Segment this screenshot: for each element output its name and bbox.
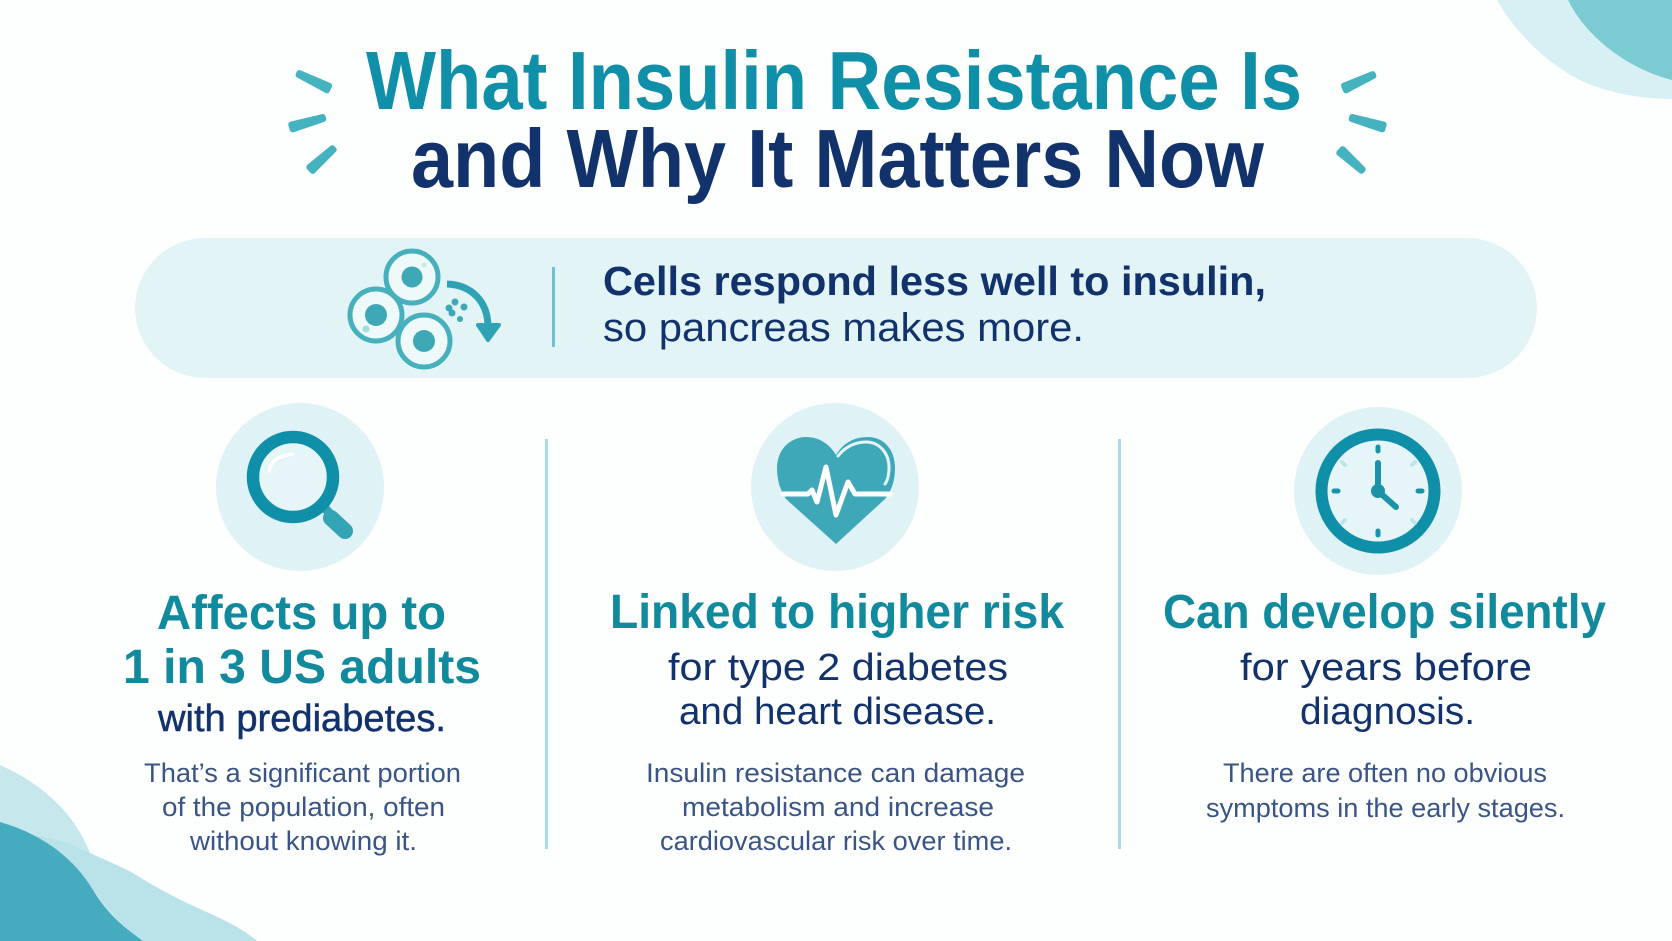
icon: magnifying glass: [216, 403, 384, 571]
column divider 1: [545, 439, 548, 849]
icon: cells with arrow: [350, 251, 499, 367]
subheading: and heart disease.: [679, 691, 996, 733]
column divider 2: [1118, 439, 1121, 849]
heading: Affects up to: [157, 587, 446, 640]
subheading: diagnosis.: [1300, 691, 1475, 733]
body text: symptoms in the early stages.: [1206, 793, 1565, 823]
banner divider: [552, 267, 555, 347]
body text: without knowing it.: [189, 826, 417, 856]
body text: [144, 758, 461, 856]
body text: [1206, 758, 1565, 823]
body text: [646, 758, 1025, 856]
panel: affects adults: [123, 403, 481, 856]
body text: of the population, often: [162, 792, 445, 822]
title accent sparks left: [291, 73, 334, 171]
subheading: for type 2 diabetes: [668, 647, 1008, 689]
body text: There are often no obvious: [1223, 758, 1547, 788]
banner text: [603, 258, 1266, 350]
body text: Insulin resistance can damage: [646, 758, 1025, 788]
heading: Can develop silently: [1163, 586, 1606, 639]
banner text: so pancreas makes more.: [603, 306, 1084, 350]
body text: metabolism and increase: [682, 792, 994, 822]
heading: [123, 587, 481, 694]
body text: That’s a significant portion: [144, 758, 461, 788]
title line 1: What Insulin Resistance Is: [366, 34, 1302, 127]
title: [366, 34, 1302, 205]
title line 2: and Why It Matters Now: [411, 112, 1264, 205]
panel: linked to risk: [610, 403, 1064, 856]
panel: develops silently: [1163, 407, 1606, 823]
icon: heart with pulse: [751, 403, 919, 571]
banner text: Cells respond less well to insulin,: [603, 258, 1266, 304]
subheading: with prediabetes.: [157, 698, 446, 740]
body text: cardiovascular risk over time.: [660, 826, 1012, 856]
subheading: [1240, 647, 1532, 733]
title accent sparks right: [1339, 74, 1384, 171]
decorative corner waves: bottom left: [0, 765, 257, 941]
subheading: for years before: [1240, 647, 1532, 689]
banner background: [135, 238, 1537, 378]
decorative corner waves: top right: [1497, 0, 1672, 99]
definition banner: [135, 238, 1537, 378]
heading: 1 in 3 US adults: [123, 641, 481, 694]
icon: clock: [1294, 407, 1462, 575]
subheading: [668, 647, 1008, 733]
heading: Linked to higher risk: [610, 586, 1064, 639]
